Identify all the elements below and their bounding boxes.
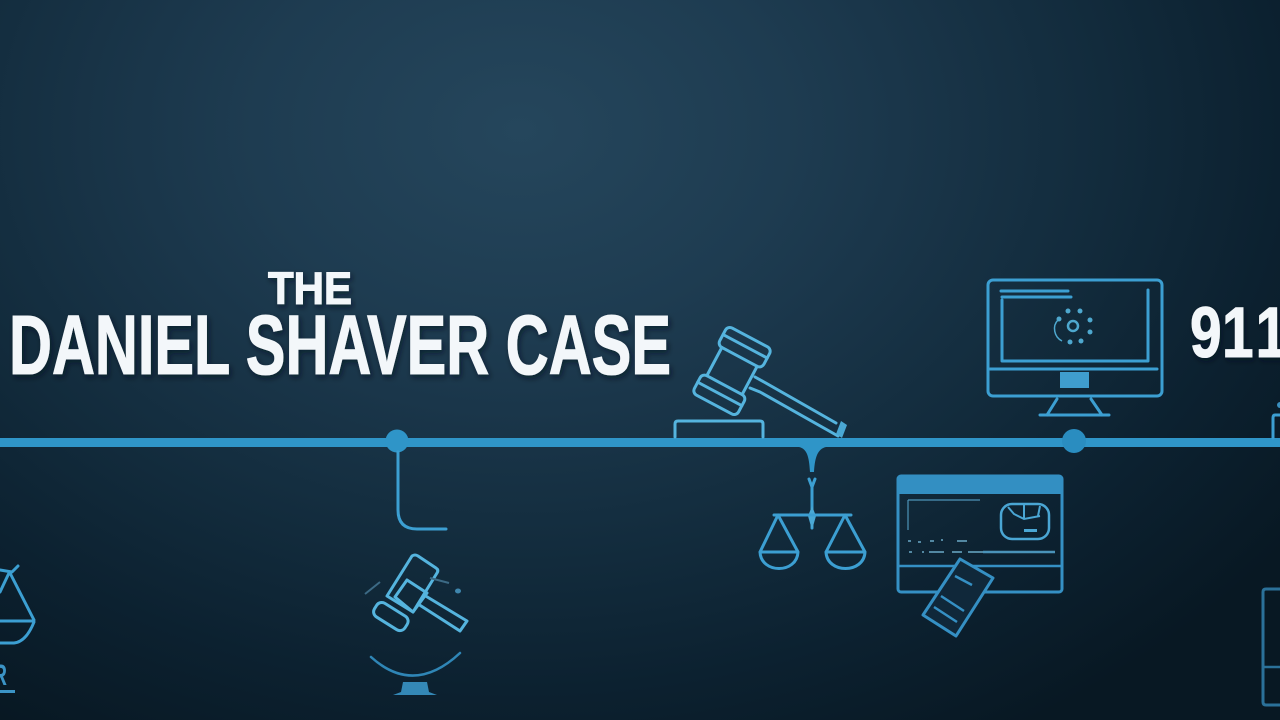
letter underline xyxy=(0,690,15,693)
scales beam xyxy=(774,514,851,516)
gavel head block xyxy=(387,555,438,612)
gavel handle xyxy=(418,595,467,631)
phone xyxy=(923,559,993,636)
icon: browser dashboard with phone xyxy=(897,475,1063,636)
browser lower divider xyxy=(898,565,1062,567)
timeline node right xyxy=(1062,429,1086,453)
timeline xyxy=(0,429,1280,472)
timeline bar xyxy=(0,438,1280,447)
faint orbit marks xyxy=(365,578,449,594)
monitor button xyxy=(1060,372,1089,388)
icon: partial figure at right edge xyxy=(1273,402,1280,438)
icon: gavel with globe arc xyxy=(365,555,467,695)
browser title bar xyxy=(897,475,1063,494)
icon: partial scales at left edge xyxy=(0,566,34,693)
timeline node left xyxy=(386,430,408,452)
connector from node to gavel xyxy=(398,452,446,529)
gavel handle xyxy=(750,377,838,436)
gavel head xyxy=(692,326,772,416)
device frame xyxy=(1263,589,1280,705)
title xyxy=(9,263,671,392)
monitor frame xyxy=(988,280,1162,396)
gavel cap xyxy=(371,600,410,633)
sound block xyxy=(675,421,763,437)
browser progress line xyxy=(983,551,1055,553)
scales pole xyxy=(809,479,815,528)
icon: gavel on sound block xyxy=(675,326,847,438)
left pan xyxy=(760,515,798,568)
gavel handle end xyxy=(836,421,847,438)
icon: computer monitor xyxy=(988,280,1162,415)
monitor stand xyxy=(1040,399,1109,415)
figure body xyxy=(1273,415,1280,438)
loading spinner xyxy=(1055,308,1092,344)
browser text lines xyxy=(908,500,980,530)
icon: partial device at right edge xyxy=(1263,589,1280,705)
figure head xyxy=(1277,402,1280,408)
monitor chin line xyxy=(990,368,1157,370)
right pan xyxy=(826,515,865,568)
orbit dot xyxy=(455,588,461,594)
device divider xyxy=(1263,666,1280,668)
timeline drip xyxy=(799,447,826,472)
gauge xyxy=(1001,504,1049,539)
title line: the: THE xyxy=(268,263,352,314)
browser window xyxy=(898,476,1062,592)
icon: scales of justice xyxy=(760,479,865,568)
scales pivot xyxy=(808,506,816,530)
monitor screen xyxy=(1001,290,1148,361)
gavel inner block xyxy=(395,580,427,612)
title line: daniel shaver case: DANIEL SHAVER CASE xyxy=(9,298,671,392)
browser small dashes xyxy=(908,540,983,552)
globe base xyxy=(393,682,437,695)
scale beam and pan xyxy=(0,566,34,643)
globe arc xyxy=(371,653,460,676)
